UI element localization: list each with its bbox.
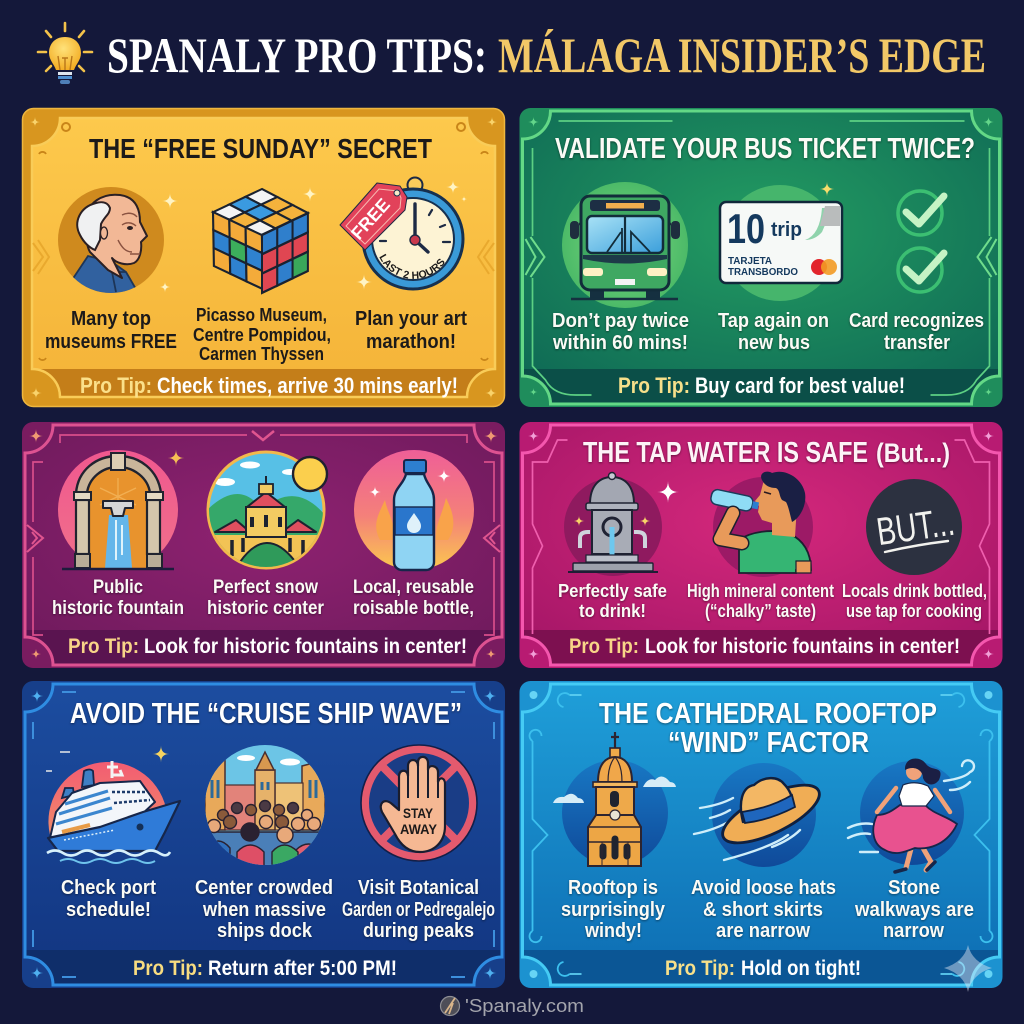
captions <box>552 310 984 354</box>
pro tip: Look for historic fountains in center! <box>144 635 467 658</box>
captions: to drink! <box>579 601 646 621</box>
captions: roisable bottle, <box>353 598 474 619</box>
icon: clock with free tag: LAST 2 HOURS <box>379 254 444 279</box>
icon: transit card: TARJETA <box>728 255 772 267</box>
sparkle <box>152 746 170 762</box>
captions: Tap again on <box>718 310 829 332</box>
captions: Perfect snow <box>213 577 318 598</box>
panel: cruise ship <box>22 681 505 988</box>
captions: High mineral content <box>687 581 834 601</box>
panel: tap water <box>520 422 1002 668</box>
sparkle <box>820 182 834 196</box>
captions: historic fountain <box>52 598 184 619</box>
icon: stay away hand: STAY <box>403 806 433 821</box>
sparkles <box>160 180 467 292</box>
icon: Rubik cube <box>213 189 308 293</box>
icon: drinking fountain <box>564 472 662 576</box>
icon: transit card <box>720 185 842 301</box>
pro tip: Pro Tip: <box>665 957 735 980</box>
panel frame <box>520 108 1002 407</box>
heading: THE CATHEDRAL ROOFTOP <box>599 698 937 730</box>
icon: stay away hand: AWAY <box>400 822 437 837</box>
title <box>38 23 986 84</box>
captions: schedule! <box>66 899 151 921</box>
pro tip: Check times, arrive 30 mins early! <box>157 373 458 398</box>
pro tip <box>80 373 458 398</box>
captions: Locals drink bottled, <box>842 581 987 601</box>
captions: during peaks <box>363 920 474 942</box>
captions: Many top <box>71 308 151 330</box>
icon: cathedral tower <box>553 732 676 866</box>
panel frame <box>22 681 505 988</box>
captions: use tap for cooking <box>846 601 982 621</box>
pro tip <box>665 957 861 980</box>
captions: Carmen Thyssen <box>199 344 324 364</box>
captions: Centre Pompidou, <box>193 325 331 345</box>
icon: stay away hand <box>361 745 477 861</box>
captions: narrow <box>883 920 944 942</box>
captions: Public <box>93 577 143 598</box>
pro tip: Pro Tip: <box>80 373 152 398</box>
captions: Center crowded <box>195 877 333 899</box>
heading: THE “FREE SUNDAY” SECRET <box>89 133 432 164</box>
captions: Local, reusable <box>353 577 474 598</box>
icon: chalkboard but <box>866 479 962 575</box>
captions: Perfectly safe <box>558 581 667 601</box>
icon: clock with free tag <box>340 176 464 290</box>
icon: dancer in wind <box>848 758 974 872</box>
icon: transit card: 10 <box>727 205 765 252</box>
icon: person drinking <box>710 472 813 577</box>
heading <box>599 698 937 759</box>
captions: Stone <box>888 877 940 899</box>
captions: walkways are <box>854 899 974 921</box>
pro tip: Buy card for best value! <box>695 373 905 398</box>
icon: historic center <box>207 452 327 570</box>
captions <box>61 877 495 942</box>
icon: light bulb <box>38 23 92 84</box>
pro tip: Pro Tip: <box>618 373 690 398</box>
pro tip: Return after 5:00 PM! <box>208 957 397 980</box>
panel frame <box>520 422 1002 668</box>
captions: surprisingly <box>561 899 666 921</box>
icon: transit card: TRANSBORDO <box>728 266 798 278</box>
captions: transfer <box>884 332 950 354</box>
pro tip <box>133 957 397 980</box>
captions: Garden or Pedregalejo <box>342 899 495 921</box>
icon: flying hat <box>694 763 827 867</box>
captions: museums FREE <box>45 331 177 353</box>
icon: water bottle <box>354 450 474 570</box>
captions: Rooftop is <box>568 877 658 899</box>
captions: when massive <box>202 899 326 921</box>
icon: Picasso portrait <box>58 187 164 296</box>
watermark star <box>944 945 992 992</box>
captions: marathon! <box>366 331 456 353</box>
sparkles <box>369 469 451 498</box>
captions: Check port <box>61 877 156 899</box>
captions: Plan your art <box>355 308 467 330</box>
captions: Avoid loose hats <box>691 877 836 899</box>
pro tip: Pro Tip: <box>133 957 203 980</box>
panel frame <box>22 108 505 406</box>
sparkle <box>168 450 184 466</box>
pro tip: Pro Tip: <box>68 635 139 658</box>
panel: fountains <box>22 422 505 668</box>
icon: historic fountain <box>58 450 178 570</box>
panel frame <box>520 681 1002 988</box>
captions: (“chalky” taste) <box>705 601 816 621</box>
footer brand <box>440 995 584 1016</box>
panel: cathedral rooftop <box>520 681 1002 992</box>
pro tip: Hold on tight! <box>741 957 861 980</box>
captions: Card recognizes <box>849 310 984 332</box>
panel frame <box>22 422 505 668</box>
captions <box>52 577 474 619</box>
panel: bus ticket <box>520 108 1002 407</box>
heading: (But...) <box>876 438 950 468</box>
panel: free sunday <box>22 108 506 408</box>
icon: crowd in plaza <box>205 745 326 866</box>
pro tip: Pro Tip: <box>569 635 639 658</box>
icon: cruise ship <box>46 752 180 863</box>
captions: & short skirts <box>703 899 823 921</box>
captions: new bus <box>738 332 810 354</box>
icon: transit card: trip <box>771 219 802 241</box>
pro tip: Look for historic fountains in center! <box>645 635 960 658</box>
captions <box>558 581 987 621</box>
heading: THE TAP WATER IS SAFE <box>583 437 868 469</box>
captions: ships dock <box>217 920 313 942</box>
icon: chalkboard but: BUT... <box>874 501 957 554</box>
captions: are narrow <box>716 920 810 942</box>
captions: Don’t pay twice <box>552 310 689 332</box>
icon: clock with free tag: FREE <box>347 194 394 244</box>
captions <box>45 305 467 364</box>
icon: brand logo <box>440 996 460 1016</box>
captions: Visit Botanical <box>358 877 479 899</box>
captions <box>561 877 974 942</box>
sparkles <box>574 481 679 526</box>
captions: windy! <box>584 920 642 942</box>
captions: Picasso Museum, <box>196 305 327 325</box>
captions: within 60 mins! <box>552 332 688 354</box>
pro tip <box>618 373 905 398</box>
heading: AVOID THE “CRUISE SHIP WAVE” <box>70 698 462 730</box>
icon: bus <box>562 182 688 308</box>
footer text: 'Spanaly.com <box>465 995 584 1016</box>
heading: “WIND” FACTOR <box>668 727 869 759</box>
icon: two check marks <box>898 191 944 292</box>
title text white: SPANALY PRO TIPS: <box>107 27 487 83</box>
captions: historic center <box>207 598 325 619</box>
